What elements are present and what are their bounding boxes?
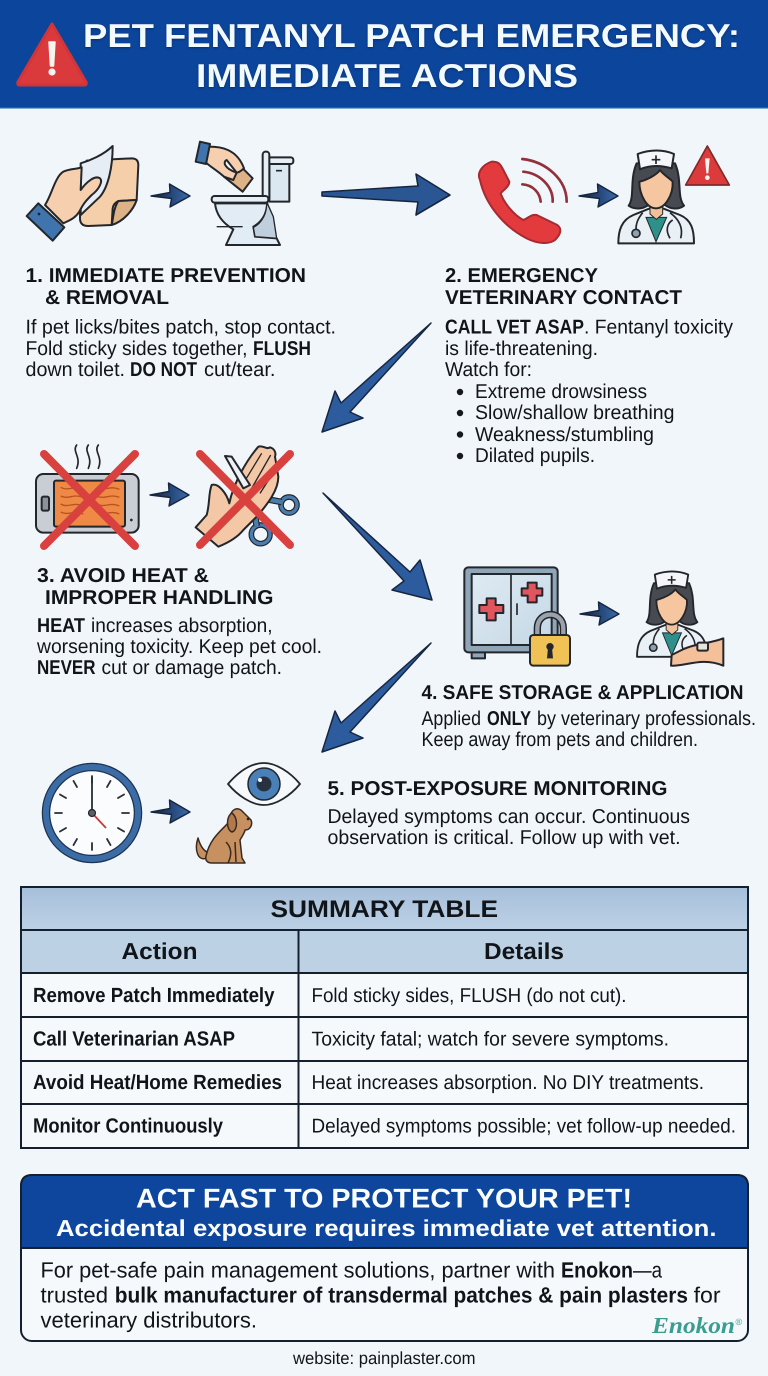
step 1 heading: & REMOVAL	[45, 287, 169, 309]
icon: warning triangle	[18, 24, 86, 85]
icon: hand with scissors crossed out	[196, 446, 297, 547]
arrow: storage to vet	[580, 602, 619, 625]
partner text: For pet-safe pain management solutions, partner with	[40, 1258, 555, 1282]
step 3 heading: IMPROPER HANDLING	[45, 587, 274, 609]
table row: avoid heat: Avoid Heat/Home Remedies	[33, 1071, 282, 1094]
arrow: hand to toilet	[151, 184, 190, 207]
step 2 heading: VETERINARY CONTACT	[445, 287, 682, 309]
symptom list: Weakness/stumbling	[475, 424, 654, 446]
table row: call vet	[33, 1028, 669, 1050]
table row: avoid heat	[33, 1071, 704, 1094]
step 1 text: Fold sticky sides together,	[26, 338, 248, 360]
step 5 text	[328, 806, 690, 849]
partner text: veterinary distributors.	[40, 1308, 257, 1332]
symptom list: Dilated pupils.	[475, 445, 595, 467]
call to action banner	[21, 1175, 748, 1248]
partner text: Enokon	[561, 1258, 633, 1282]
table title: SUMMARY TABLE	[270, 896, 498, 923]
title	[83, 17, 740, 94]
icon: hand folding patch	[27, 146, 138, 241]
icon: locked medicine cabinet	[464, 567, 570, 666]
table column headers	[122, 938, 564, 964]
icon: veterinary nurse with alert	[618, 146, 729, 243]
call to action banner: Accidental exposure requires immediate vet attention.	[56, 1215, 716, 1241]
step 5 text: Delayed symptoms can occur. Continuous	[328, 806, 690, 828]
step 2 heading: 2. EMERGENCY	[445, 265, 599, 287]
step 3 text: HEAT	[37, 615, 85, 637]
title: IMMEDIATE ACTIONS	[196, 57, 578, 94]
table column headers: Action	[122, 938, 198, 964]
Enokon logo: ®	[736, 1317, 742, 1327]
step 3 text: cut or damage patch.	[102, 657, 282, 679]
step 5 text: observation is critical. Follow up with vet.	[328, 827, 680, 849]
step 2 text: . Fentanyl toxicity	[584, 316, 733, 338]
symptom list: Extreme drowsiness	[475, 381, 647, 403]
step 3 heading: 3. AVOID HEAT &	[37, 565, 209, 587]
table column headers: Details	[484, 938, 564, 964]
icon: eye	[228, 763, 300, 805]
table row: call vet: Call Veterinarian ASAP	[33, 1028, 235, 1050]
step 1 text: FLUSH	[253, 338, 311, 360]
step 3 text: worsening toxicity. Keep pet cool.	[36, 636, 322, 658]
step 1 text	[26, 316, 336, 381]
step 4 text	[422, 708, 756, 751]
step 4 heading: 4. SAFE STORAGE & APPLICATION	[422, 682, 744, 704]
step 1 text: DO NOT	[130, 359, 197, 381]
step 1 heading: 1. IMMEDIATE PREVENTION	[26, 265, 306, 287]
icon: red telephone with signal waves	[479, 159, 567, 243]
step 1 text: down toilet.	[26, 359, 125, 381]
icon: toilet with hand flushing patch	[196, 142, 293, 245]
step 1 text: If pet licks/bites patch, stop contact.	[26, 316, 336, 338]
step 2 heading	[445, 265, 682, 309]
arrow: clock to observation	[151, 800, 190, 823]
arrow: step 3 to step 4	[323, 493, 432, 600]
call to action panel	[21, 1175, 748, 1341]
partner text: for	[694, 1282, 721, 1308]
icon: heating pad crossed out	[36, 445, 139, 546]
icon: vet applying patch to pet	[637, 571, 723, 666]
partner text: —a	[633, 1258, 663, 1282]
step 3 heading	[37, 565, 274, 609]
step 4 text: Applied	[422, 708, 481, 730]
table row: remove patch: Remove Patch Immediately	[33, 984, 275, 1007]
step 4 text: ONLY	[487, 708, 532, 730]
table row: monitor: Monitor Continuously	[33, 1114, 224, 1138]
header banner	[0, 0, 768, 108]
step 3 text: increases absorption,	[91, 615, 272, 637]
table row: call vet: Toxicity fatal; watch for severe symptoms.	[312, 1028, 669, 1050]
table row: remove patch	[33, 984, 626, 1007]
step 3 text: NEVER	[37, 657, 96, 679]
step 4 text: Keep away from pets and children.	[422, 729, 698, 751]
step 1 text: cut/tear.	[204, 359, 276, 381]
summary table	[21, 887, 748, 1148]
partner text	[40, 1258, 721, 1332]
call to action banner: ACT FAST TO PROTECT YOUR PET!	[136, 1184, 632, 1214]
step 2 text	[445, 316, 733, 467]
arrow: step 4 to step 5	[322, 643, 431, 752]
partner text: trusted	[40, 1282, 108, 1308]
step 5 heading: 5. POST-EXPOSURE MONITORING	[328, 778, 668, 800]
table row: remove patch: Fold sticky sides, FLUSH (do not cut).	[312, 985, 626, 1007]
table row: monitor: Delayed symptoms possible; vet follow-up needed.	[312, 1116, 736, 1138]
partner text: bulk manufacturer of transdermal patches & pain plasters	[115, 1282, 688, 1308]
title: PET FENTANYL PATCH EMERGENCY:	[83, 17, 740, 54]
step 2 text: CALL VET ASAP	[445, 316, 584, 338]
table row: avoid heat: Heat increases absorption. No DIY treatments.	[312, 1072, 704, 1094]
icon: sitting dog	[196, 809, 252, 863]
website footer: website: painplaster.com	[292, 1348, 476, 1368]
arrow: step 1 to step 2	[322, 174, 450, 215]
step 2 text: is life-threatening.	[445, 338, 598, 360]
step 2 text: Watch for:	[445, 359, 532, 381]
arrow: heat to cutting	[150, 483, 189, 506]
step 1 heading	[26, 265, 306, 309]
arrow: step 2 to step 3	[322, 323, 431, 432]
table row: monitor	[33, 1114, 736, 1138]
icon: clock	[46, 767, 138, 859]
symptom list	[457, 381, 674, 467]
Enokon logo: Enokon	[651, 1313, 735, 1338]
arrow: phone to vet	[579, 184, 618, 207]
symptom list: Slow/shallow breathing	[475, 402, 674, 424]
step 3 text	[36, 615, 322, 679]
